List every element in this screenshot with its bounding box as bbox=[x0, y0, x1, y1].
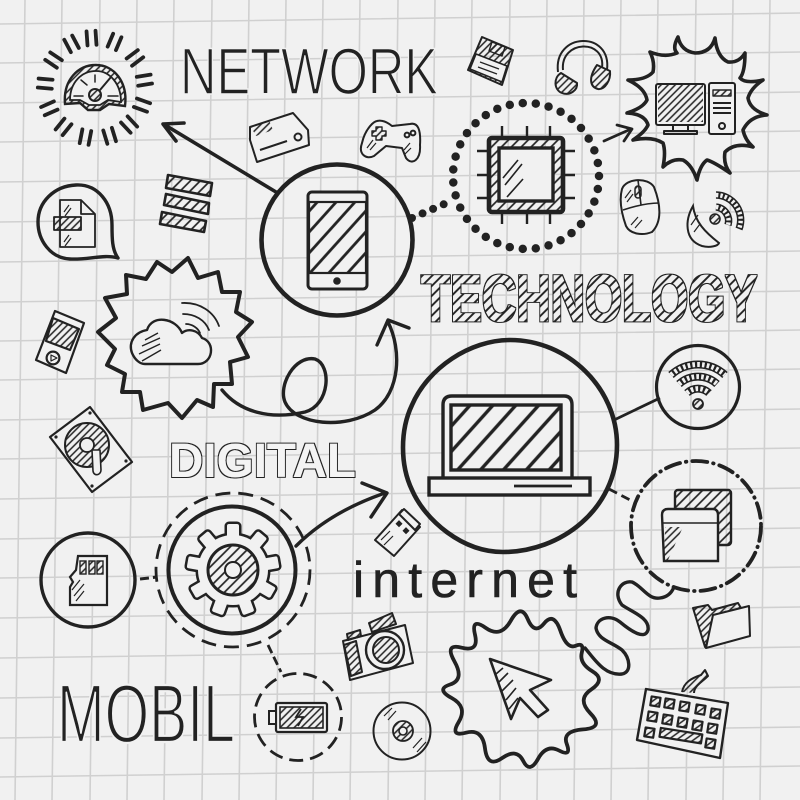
dotted ring bbox=[453, 103, 599, 249]
heading: NETWORK: NETWORK bbox=[180, 34, 438, 108]
icon: floppy disk bbox=[468, 37, 513, 85]
connector: laptop to windows bbox=[609, 489, 632, 501]
heading: internet: internet bbox=[353, 552, 577, 608]
panel: computer in starburst bbox=[627, 37, 767, 180]
desktop monitor and tower bbox=[656, 83, 735, 134]
icon: camera bbox=[343, 613, 413, 680]
icon: game controller bbox=[361, 121, 420, 162]
panel: windows in dash-dot circle bbox=[631, 461, 761, 591]
connector: memory card to gear bbox=[140, 577, 157, 579]
arrow: chip to computer bbox=[604, 125, 632, 141]
icon: keyboard bbox=[637, 670, 728, 758]
connector: wavy cable bbox=[585, 582, 674, 674]
signal arcs bbox=[182, 303, 219, 333]
panel: document in speech bubble bbox=[38, 185, 118, 259]
jagged burst bbox=[98, 258, 252, 418]
heading: DIGITAL: DIGITAL bbox=[169, 435, 356, 488]
speech bubble bbox=[38, 185, 118, 259]
icon: music player bbox=[36, 311, 84, 373]
starburst outline bbox=[627, 37, 767, 180]
panel: processor chip in dotted circle bbox=[412, 103, 599, 249]
panel: cloud in jagged burst bbox=[98, 258, 252, 418]
panel: cursor in wavy gear bbox=[443, 611, 599, 767]
heading: MOBIL: MOBIL bbox=[57, 667, 235, 760]
icon: stacked server bars bbox=[160, 175, 212, 232]
file icon bbox=[60, 200, 95, 247]
cloud icon bbox=[131, 320, 211, 364]
arrow: gear to laptop bbox=[296, 483, 387, 546]
panel: gear in double circle bbox=[156, 493, 310, 647]
laptop bbox=[429, 396, 590, 495]
chip bbox=[477, 126, 575, 224]
panel: laptop circle bbox=[403, 340, 617, 552]
connector: gear to battery bbox=[268, 645, 281, 672]
dotted connector to phone bbox=[412, 202, 449, 218]
connector: laptop to wifi bbox=[612, 398, 660, 421]
icon: hard disk drive bbox=[50, 407, 132, 492]
panel: wifi circle bbox=[656, 346, 740, 428]
wavy gear outline bbox=[443, 611, 599, 767]
icon: external drive bbox=[250, 113, 309, 162]
icon: headphones bbox=[555, 41, 610, 94]
panel: smartphone circle bbox=[262, 164, 412, 316]
cursor arrow bbox=[490, 659, 551, 719]
icon: compact disc bbox=[374, 702, 430, 760]
phone bbox=[308, 192, 367, 289]
solid inner ring bbox=[168, 506, 296, 634]
gear teeth and body bbox=[187, 524, 279, 615]
dashed outer ring bbox=[156, 493, 310, 647]
icon: folder bbox=[693, 603, 750, 648]
icon: usb flash drive bbox=[375, 509, 420, 556]
icon: computer mouse bbox=[621, 180, 659, 234]
icon: satellite dish bbox=[688, 195, 741, 247]
arrow: curvy loop from cloud to phone bbox=[222, 320, 409, 422]
arrow: phone to speedometer bbox=[163, 123, 276, 192]
panel: memory card circle bbox=[41, 533, 135, 627]
icon: speedometer with radial ticks bbox=[38, 31, 152, 145]
panel: battery in dashed circle bbox=[254, 674, 342, 760]
